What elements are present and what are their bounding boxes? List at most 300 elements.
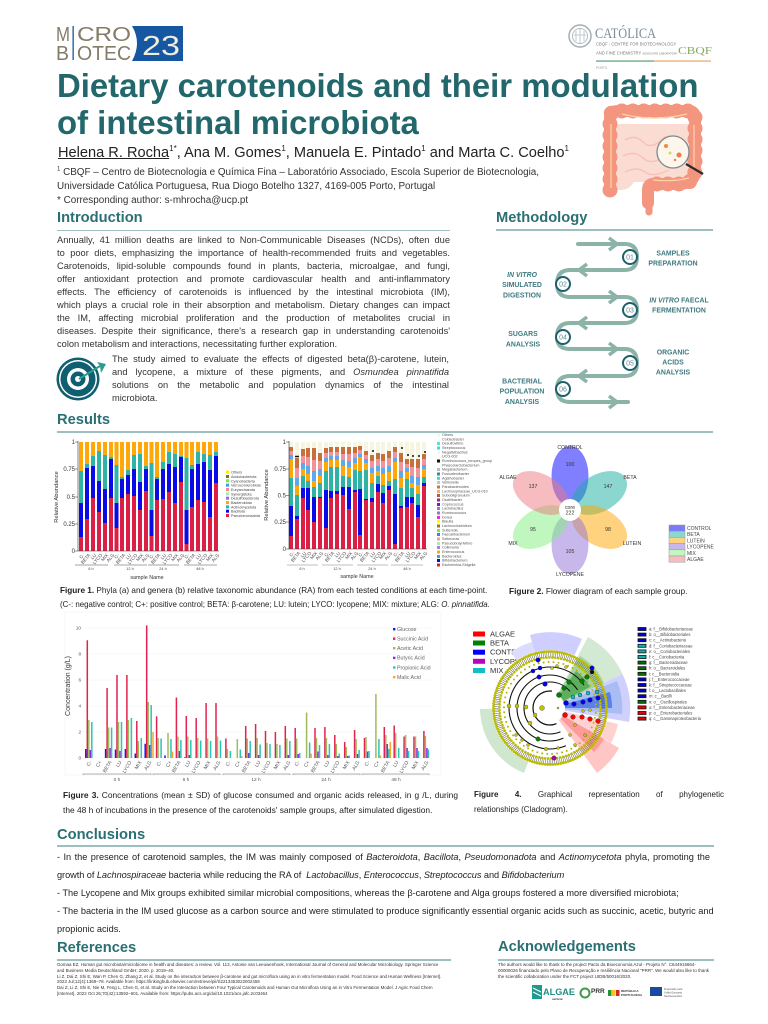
- legend: genera: Lachnospiraceae_UCG-010: [442, 489, 488, 493]
- legend: acids: Butyric Acid: [397, 656, 425, 662]
- chart: glucose and organic acids: 10: [76, 626, 81, 630]
- chart: phyla relative abundance: C-: [148, 552, 156, 560]
- text: acknowledgements: 00000026 financiado pelo Plano de Recuperação e resiliência Nacional "PRR". We would also like to thank: [498, 968, 709, 973]
- text: introduction: colon metabolism and interactions, necessitating further exploration.: [57, 338, 337, 348]
- heading: Results: Results: [57, 412, 110, 428]
- legend: genera: Collinsella: [442, 546, 460, 550]
- chart: glucose and organic acids: MIX: [203, 759, 213, 771]
- chart: phyla relative abundance: ALG: [141, 552, 151, 563]
- chart: genera relative abundance: ALG: [350, 550, 360, 561]
- logos: funding partners: REPÚBLICA: [621, 988, 639, 993]
- legend: genera: Phascolarctobacterium: [442, 463, 480, 467]
- chart: genera relative abundance: 0.25: [274, 520, 287, 526]
- diagram: methodology flow: ACIDS: [662, 360, 684, 366]
- chart: phyla relative abundance: LYCO: [162, 552, 174, 565]
- legend: genera: [442, 433, 492, 567]
- legend: phyla: Bacillota: [231, 510, 246, 514]
- legend: genera: Bifidobacterium: [442, 559, 467, 563]
- legend: flower: LYCOPENE: [687, 545, 715, 551]
- chart: phyla relative abundance: [54, 440, 262, 581]
- legend: phyla: Actinomycetota: [231, 505, 257, 509]
- legend: genera: Faecalibacterium: [442, 533, 470, 537]
- logo: Microbiotec 23: 23: [142, 30, 180, 61]
- text: references: Dai Z, Li Z, Shi E, Nie M, Feng L, Chen G, et al. Study on the Interaction between Four Typical Carotenoids and Human Gut Microflora Using an in Vitro Fermentation Model. J Agric Food Chem: [57, 985, 433, 990]
- legend: flower: CONTROL: [687, 526, 712, 532]
- logo: Catolica CBQF: PORTO: [596, 66, 608, 70]
- chart: glucose and organic acids: C+: [234, 760, 243, 769]
- chart: phyla relative abundance: 0.75: [63, 467, 76, 473]
- authors: Helena R. Rocha1*, Ana M. Gomes1, Manuela E. Pintado1 and Marta C. Coelho1: [58, 144, 569, 161]
- diagram: methodology flow: 02: [559, 282, 567, 288]
- chart: genera relative abundance: 0: [283, 547, 287, 553]
- diagram: methodology flow: 04: [559, 334, 567, 342]
- text: study aim: microbiota.: [112, 392, 157, 402]
- diagram: flower of sample groups: 137: [529, 484, 537, 490]
- legend: genera: Subdoligranulum: [442, 494, 470, 498]
- legend: cladogram taxa: n: o__Oscillospirales: [649, 699, 687, 704]
- chart: phyla relative abundance: BETA: [150, 552, 162, 565]
- legend: flower: MIX: [687, 551, 697, 557]
- logos: funding partners: PRR: [591, 988, 605, 995]
- text: conclusions: - In the presence of carotenoid samples, the IM was mainly composed of Bacteroidota, Bacillota, Pseudomonadota and Actinomycetota phyla, promoting the: [57, 852, 710, 862]
- text: conclusions: - The bacteria in the IM used glucose as a carbon source and were stimulated to produce significantly essential organic acids such as succinic, acetic, butyric and: [57, 906, 714, 916]
- text: study aim: solutions on the metabolic and population dynamics of the intestinal: [112, 380, 449, 390]
- chart: phyla relative abundance: 1: [72, 440, 76, 446]
- chart: genera relative abundance: [264, 433, 492, 580]
- legend: cladogram taxa: q: c__Gammaproteobacteria: [649, 716, 702, 721]
- chart: glucose and organic acids: LYCO: [399, 760, 411, 774]
- chart: glucose and organic acids: LU: [184, 760, 193, 769]
- diagram: methodology flow: FERMENTATION: [652, 308, 706, 314]
- chart: phyla relative abundance: 0.5: [67, 495, 76, 501]
- diagram: flower of sample groups: ALGAE: [499, 475, 517, 481]
- logos: funding partners: Financiado pela: [664, 987, 683, 991]
- legend: genera: Megabacterium: [442, 468, 467, 472]
- diagram: methodology flow: ANALYSIS: [656, 370, 691, 376]
- chart: genera relative abundance: Relative Abundance: [264, 469, 270, 521]
- chart: genera relative abundance: ALG: [315, 550, 325, 561]
- chart: glucose and organic acids: ALG: [143, 760, 154, 772]
- chart: glucose and organic acids: ALG: [212, 760, 223, 772]
- text: conclusions: propionic acids.: [57, 924, 121, 934]
- chart: phyla relative abundance: LU: [125, 553, 132, 560]
- logos: funding partners: vertical: [552, 997, 563, 1001]
- heading: References: References: [57, 940, 136, 956]
- chart: phyla relative abundance: MIX: [135, 553, 144, 562]
- legend: cladogram taxa: l: o__Lactobacillales: [649, 688, 686, 693]
- chart: glucose and organic acids: MIX: [134, 759, 144, 771]
- chart: glucose and organic acids: 4: [78, 704, 81, 708]
- legend: cladogram taxa: o: f__Enterobacteriaceae: [649, 705, 695, 710]
- legend: cladogram groups: BETA: [490, 638, 509, 648]
- diagram: flower of sample groups: LYCOPENE: [556, 572, 584, 578]
- logos: funding partners: NextGeneration: [664, 994, 683, 998]
- diagram: flower of sample groups: 105: [566, 549, 574, 555]
- heading: Conclusions: Conclusions: [57, 827, 145, 843]
- chart: genera relative abundance: 12 h: [333, 567, 341, 571]
- chart: genera relative abundance: ALG: [384, 550, 394, 561]
- legend: cladogram taxa: f: c__Coriobacteriia: [649, 654, 685, 660]
- diagram: methodology flow: 05: [626, 360, 634, 368]
- diagram: methodology flow: SUGARS: [508, 331, 538, 338]
- caption: figure 4: Figure 4. Graphical representation of phylogenetic: [474, 790, 724, 799]
- logos: funding partners: União Europeia: [664, 990, 682, 994]
- heading: Acknowledgements: Acknowledgements: [498, 939, 636, 955]
- logo: Microbiotec 23: CRO: [77, 24, 131, 46]
- chart: genera relative abundance: MIX: [413, 551, 422, 560]
- chart: genera relative abundance: BETA: [359, 550, 371, 563]
- chart: genera relative abundance: LU: [334, 551, 341, 558]
- legend: flower: BETA: [687, 532, 700, 538]
- affiliation: Universidade Católica Portuguesa, Rua Diogo Botelho 1327, 4169-005 Porto, Portugal: [57, 181, 435, 192]
- chart: glucose and organic acids: BETA: [380, 759, 392, 774]
- legend: phyla: Pseudomonadota: [231, 514, 261, 518]
- chart: genera relative abundance: ALG: [419, 550, 429, 561]
- chart: glucose and organic acids: 0: [78, 756, 81, 760]
- legend: cladogram taxa: e: o__Coriobacteriales: [649, 649, 690, 654]
- text: introduction: diseases. Despite their significance, there's a research gap in understanding carotenoids': [57, 326, 450, 336]
- chart: genera relative abundance: 0.5: [278, 494, 287, 500]
- chart: genera relative abundance: LU: [369, 551, 376, 558]
- chart: phyla relative abundance: C-: [183, 552, 191, 560]
- text: study aim: The study aimed to evaluate the effects of digested beta(β)-carotene, lutein,: [112, 354, 449, 364]
- chart: glucose and organic acids: C-: [364, 760, 372, 768]
- text: introduction: effects. The efficiency of carotenoids is influenced by the intestinal microbiota (IM),: [57, 286, 450, 296]
- text: references: Gomaa EZ. Human gut microbiota/microbiome in health and diseases: a review. Vol. 113, Antonie van Leeuwenhoek, International Journal of General and Molecular Microbiology. Springer Science: [57, 962, 438, 967]
- legend: genera: Negativibacillus: [442, 450, 468, 454]
- legend: cladogram taxa: i: c__Bacteroidia: [649, 671, 680, 676]
- legend: cladogram taxa: g: f__Bacteroidaceae: [649, 660, 688, 665]
- chart: phyla relative abundance: ALG: [106, 552, 116, 563]
- diagram: methodology flow: SIMULATED: [502, 282, 542, 289]
- chart: glucose and organic acids: 2: [78, 730, 81, 734]
- text: conclusions: growth of Lachnospiraceae bacteria while reducing the RA of Lactobacillus, Enterococcus, Streptococcus and Bifidobacterium: [57, 870, 564, 880]
- legend: genera: Bacteroides: [442, 554, 462, 558]
- logos: funding partners: [532, 985, 683, 1001]
- diagram: methodology flow: PREPARATION: [648, 260, 698, 268]
- text: introduction: Carotenoids, lipid-soluble compounds found in plants, bacteria, microalgae, and fungi,: [57, 260, 450, 270]
- text: introduction: which plays a crucial role in their absorption and metabolism. Dietary changes can impact: [57, 300, 450, 310]
- legend: cladogram taxa: d: f__Coriobacteriaceae: [649, 643, 693, 648]
- legend: cladogram groups: LYCOPENE: [490, 657, 530, 666]
- title: of intestinal microbiota: [57, 104, 419, 140]
- chart: genera relative abundance: MIX: [309, 551, 318, 560]
- diagram: methodology flow: ANALYSIS: [505, 399, 540, 406]
- chart: glucose and organic acids: MIX: [411, 759, 421, 771]
- chart: glucose and organic acids: LYCO: [191, 760, 203, 774]
- chart: genera relative abundance: LYCO: [371, 550, 383, 563]
- chart: phyla relative abundance: 0: [72, 549, 76, 555]
- legend: genera: Streptococcus: [442, 446, 466, 450]
- diagram: methodology flow: SAMPLES: [656, 250, 690, 258]
- heading: Introduction: Introduction: [57, 210, 143, 226]
- legend: acids: [393, 627, 431, 681]
- diagram: flower of sample groups: 95: [530, 527, 536, 533]
- chart: phyla relative abundance: 12 h: [126, 567, 134, 571]
- legend: phyla: [226, 470, 262, 518]
- chart: phyla relative abundance: 48 h: [196, 567, 204, 571]
- text: conclusions: [57, 852, 714, 934]
- legend: phyla: Euryarchaeota: [231, 488, 256, 492]
- chart: genera relative abundance: LYCO: [336, 550, 348, 563]
- legend: phyla: Bacteroidota: [231, 501, 253, 505]
- chart: phyla relative abundance: C-: [113, 552, 121, 560]
- legend: acids: Succinic Acid: [397, 636, 428, 642]
- chart: glucose and organic acids: LU: [323, 760, 332, 769]
- chart: glucose and organic acids: C+: [373, 760, 382, 769]
- legend: genera: Desulfovibrio: [442, 442, 463, 446]
- chart: phyla relative abundance: ALG: [176, 552, 186, 563]
- chart: glucose and organic acids: 6: [78, 678, 81, 682]
- text: references: [Internet]. 2022 Oct 26;70(42):13592–601. Available from: https://pubs.acs.org/doi/10.1021/acs.jafc.2c03464: [57, 991, 268, 996]
- text: acknowledgements: the scientific collaboration under the FCT project UIDB/50016/2020.: [498, 974, 631, 979]
- diagram: flower of sample groups: CONTROL: [557, 445, 583, 451]
- legend: flower: LUTEIN: [687, 538, 705, 544]
- legend: cladogram groups: ALGAE: [490, 630, 515, 638]
- legend: cladogram taxa: b: o__Bifidobacteriales: [649, 632, 690, 637]
- chart: glucose and organic acids: C-: [225, 760, 233, 768]
- chart: genera relative abundance: 24 h: [368, 567, 376, 571]
- legend: genera: Enterococcus: [442, 550, 464, 554]
- text: references: Li Z, Dai Z, Shi E, Wan P, Chen G, Zhang Z, et al. Study on the interaction between β-carotene and gut microflora using an in vitro fermentation model. Food Science and Human Wellness [Internet].: [57, 974, 441, 979]
- legend: genera: Blautia: [442, 520, 454, 524]
- diagram: flower of sample groups: core: [565, 505, 575, 511]
- legend: cladogram taxa: m: c__Bacilli: [649, 694, 672, 699]
- text: introduction: offer antioxidant protection and promote cardiovascular health and anti-inflammatory: [57, 274, 450, 284]
- diagram: flower of sample groups: BETA: [623, 475, 637, 481]
- chart: genera relative abundance: LYCO: [301, 550, 313, 563]
- diagram: flower of sample groups: 222: [566, 510, 574, 516]
- legend: phyla: Synergistota: [231, 492, 252, 496]
- legend: cladogram taxa: k: f__Streptococcaceae: [649, 682, 693, 688]
- caption: figure 3: Figure 3. Concentrations (mean ± SD) of glucose consumed and organic acids released, in g /L, during: [63, 790, 458, 800]
- legend: genera: Veillonella: [442, 481, 460, 485]
- chart: glucose and organic acids: ALG: [282, 760, 293, 772]
- diagram: methodology flow: 01: [626, 254, 634, 262]
- chart: genera relative abundance: C-: [288, 550, 296, 558]
- chart: phyla relative abundance: BETA: [185, 552, 197, 565]
- legend: flower: ALGAE: [687, 557, 704, 563]
- chart: genera relative abundance: LU: [404, 551, 411, 558]
- chart: glucose and organic acids: 0 h: [114, 777, 121, 783]
- diagram: methodology flow: DIGESTION: [503, 292, 541, 300]
- legend: cladogram taxa: [638, 626, 702, 721]
- diagram: methodology flow: 03: [626, 308, 634, 314]
- chart: genera relative abundance: LYCO: [405, 550, 417, 563]
- legend: acids: Malic Acid: [397, 675, 421, 681]
- chart: glucose and organic acids: LYCO: [330, 760, 342, 774]
- caption: figure 1: (C-: negative control; C+: positive control; BETA: β-carotene; LU: lutein; LYCO: lycopene; MIX: mixture; ALG: O. pinnatifida.: [60, 600, 490, 609]
- legend: phyla: Acidobacteriota: [231, 475, 257, 479]
- chart: genera relative abundance: MIX: [378, 551, 387, 560]
- chart: genera relative abundance: LU: [300, 551, 307, 558]
- chart: genera relative abundance: 48 h: [403, 567, 411, 571]
- chart: phyla relative abundance: LU: [195, 553, 202, 560]
- legend: phyla: Cyanobacteria: [231, 479, 256, 483]
- logo: Catolica CBQF: CBQF - CENTRE FOR BIOTECHNOLOGY: [596, 42, 676, 46]
- legend: cladogram taxa: a: f__Bifidobacteriaceae: [649, 626, 694, 632]
- legend: genera: Parabacteroides: [442, 485, 469, 489]
- chart: phyla relative abundance: MIX: [170, 553, 179, 562]
- chart: phyla relative abundance: sample Name: [130, 575, 164, 581]
- chart: genera relative abundance: BETA: [394, 550, 406, 563]
- chart: genera relative abundance: C-: [323, 550, 331, 558]
- chart: genera relative abundance: BETA: [324, 550, 336, 563]
- diagram: methodology flow: ORGANIC: [657, 350, 689, 356]
- diagram: flower of sample groups: 147: [604, 484, 612, 490]
- logo: Microbiotec 23: [56, 24, 183, 64]
- text: references: 2023 Jul;12(4):1369–78. Available from: https://linkinghub.elsevier.com/retrieve/pii/S2213453022002459: [57, 979, 260, 984]
- chart: glucose and organic acids: [65, 612, 441, 783]
- legend: genera: Lactobacillus: [442, 507, 463, 511]
- diagram: methodology flow: ANALYSIS: [506, 342, 541, 348]
- chart: glucose and organic acids: 24 h: [321, 777, 331, 783]
- chart: phyla relative abundance: LYCO: [127, 552, 139, 565]
- logos: funding partners: ALGAE: [543, 987, 575, 998]
- chart: glucose and organic acids: LU: [115, 760, 124, 769]
- caption: figure 1: Figure 1. Phyla (a) and genera (b) relative taxonomic abundance (RA) from each tested conditions at each time-point.: [60, 586, 487, 595]
- legend: genera: Sutterella: [442, 528, 459, 532]
- caption: figure 1: [60, 586, 490, 609]
- legend: genera: UCG-002: [442, 455, 458, 459]
- chart: genera relative abundance: C-: [357, 550, 365, 558]
- diagram: flower of sample groups: MIX: [508, 541, 518, 547]
- chart: glucose and organic acids: C+: [95, 760, 104, 769]
- legend: acids: Glucose: [397, 627, 416, 633]
- title: [57, 66, 698, 140]
- diagram: methodology flow: 06: [559, 386, 567, 394]
- text: introduction: the IM, affecting microbial proliferation and the production of metabolites crucial in: [57, 312, 450, 322]
- diagram: flower of sample groups: LUTEIN: [623, 541, 641, 547]
- chart: phyla relative abundance: MIX: [205, 553, 214, 562]
- text: references: [57, 962, 441, 996]
- text: acknowledgements: [498, 962, 709, 979]
- legend: phyla: Others: [231, 470, 242, 474]
- chart: glucose and organic acids: Concentration (g/L): [65, 656, 72, 716]
- legend: genera: Ruminococcus: [442, 511, 466, 515]
- icon: intestine with magnifier: [602, 104, 704, 216]
- chart: glucose and organic acids: ALG: [420, 760, 431, 772]
- legend: genera: Selimonas: [442, 537, 459, 541]
- legend: phyla: Verrucomicrobiota: [231, 484, 262, 488]
- logos: funding partners: PORTUGUESA: [621, 993, 643, 997]
- chart: glucose and organic acids: BETA: [171, 759, 183, 774]
- text: references: and Business Media Deutschland GmbH; 2020. p. 2019–40.: [57, 968, 174, 973]
- legend: genera: Coprococcus: [442, 502, 464, 506]
- chart: genera relative abundance: 1: [283, 440, 287, 446]
- chart: glucose and organic acids: 8: [78, 652, 81, 656]
- chart: phyla relative abundance: LYCO: [92, 552, 104, 565]
- chart: phyla relative abundance: Relative Abundance: [54, 471, 60, 523]
- chart: glucose and organic acids: LU: [254, 760, 263, 769]
- legend: cladogram groups: CONTROL: [490, 648, 527, 657]
- legend: phyla: Desulfobacterota: [231, 497, 260, 501]
- diagram: methodology flow: [500, 238, 709, 408]
- text: study aim: and lycopene, a mixture of these pigments, and Osmundea pinnatifida: [112, 366, 449, 376]
- legend: genera: Fusicatenibacter: [442, 472, 470, 476]
- legend: cladogram groups: [473, 630, 530, 675]
- logo: Catolica CBQF: CBQF: [678, 45, 712, 57]
- caption: figure 2: Figure 2. Flower diagram of each sample group.: [509, 586, 687, 596]
- diagram: methodology flow: POPULATION: [500, 388, 544, 396]
- chart: phyla relative abundance: ALG: [211, 552, 221, 563]
- chart: phyla relative abundance: LU: [160, 553, 167, 560]
- text: introduction: Annually, 41 million deaths are linked to Non-Communicable Diseases (NCDs), often due: [57, 234, 450, 244]
- chart: glucose and organic acids: LYCO: [122, 760, 134, 774]
- logo: Catolica CBQF: AND FINE CHEMISTRY ASSOCIATE LABORATORY: [596, 50, 678, 56]
- chart: glucose and organic acids: ALG: [351, 760, 362, 772]
- legend: genera: Escherichia-Shigella: [442, 563, 476, 567]
- chart: genera relative abundance: 0.75: [274, 467, 287, 473]
- icon: target with arrow: [56, 358, 106, 400]
- diagram: flower of sample groups: [499, 445, 715, 578]
- chart: glucose and organic acids: LU: [392, 760, 401, 769]
- legend: genera: Oscillibacter: [442, 498, 463, 502]
- chart: genera relative abundance: BETA: [290, 550, 302, 563]
- chart: glucose and organic acids: BETA: [241, 759, 253, 774]
- chart: glucose and organic acids: 48 h: [391, 777, 401, 783]
- chart: glucose and organic acids: C-: [86, 760, 94, 768]
- chart: glucose and organic acids: LYCO: [261, 760, 273, 774]
- legend: genera: Ruminococcus_torques_group: [442, 459, 492, 463]
- chart: glucose and organic acids: BETA: [310, 759, 322, 774]
- legend: cladogram taxa: h: o__Bacteroidales: [649, 666, 685, 671]
- diagram: flower of sample groups: 100: [566, 462, 574, 468]
- chart: phyla relative abundance: LU: [90, 553, 97, 560]
- chart: phyla relative abundance: LYCO: [197, 552, 209, 565]
- logo: Catolica CBQF: [568, 24, 712, 70]
- title: Dietary carotenoids and their modulation: [57, 66, 698, 104]
- legend: genera: Lachnoclostridium: [442, 524, 472, 528]
- chart: genera relative abundance: C-: [392, 550, 400, 558]
- caption: figure 3: the 48 h of incubations in the presence of the carotenoids' sample groups, after simulated digestion.: [63, 805, 432, 815]
- legend: flower: [669, 525, 715, 563]
- text: introduction: to poor diets, emphasizing the importance of health-recommended fruits and vegetables.: [57, 248, 450, 258]
- legend: genera: Agathobacter: [442, 476, 465, 480]
- chart: glucose and organic acids: 6 h: [183, 777, 190, 783]
- diagram: methodology flow: IN VITRO: [507, 272, 538, 279]
- legend: acids: Acetic Acid: [397, 646, 423, 652]
- chart: genera relative abundance: MIX: [344, 551, 353, 560]
- diagram: methodology flow: IN VITRO FAECAL: [649, 298, 709, 304]
- legend: acids: Propionic Acid: [397, 665, 431, 671]
- caption: figure 4: relationships (Cladogram).: [474, 805, 568, 814]
- chart: cladogram: [480, 632, 630, 773]
- chart: genera relative abundance: sample Name: [340, 574, 374, 580]
- chart: phyla relative abundance: C-: [78, 552, 86, 560]
- chart: phyla relative abundance: 0.25: [63, 522, 76, 528]
- legend: cladogram taxa: j: f__Enterococcaceae: [648, 677, 690, 682]
- text: acknowledgements: The authors would like to thank to the project Pacto da Bioeconomia Azul - Projeto N°. C644915664-: [498, 962, 696, 967]
- logo: Microbiotec 23: M: [56, 24, 70, 46]
- chart: phyla relative abundance: BETA: [80, 552, 92, 565]
- logo: Catolica CBQF: CATÓLICA: [595, 25, 656, 42]
- corresponding author: * Corresponding author: s-mhrocha@ucp.pt: [57, 195, 248, 206]
- legend: genera: Others: [442, 433, 453, 437]
- chart: glucose and organic acids: C+: [303, 760, 312, 769]
- legend: genera: Pseudobutyrivibrio: [442, 541, 472, 545]
- chart: glucose and organic acids: C-: [156, 760, 164, 768]
- text: conclusions: - The Lycopene and Mix groups exhibited similar microbial compositions, whereas the β-carotene and Alga groups fostered a more diversified microbiota;: [57, 888, 679, 898]
- chart: phyla relative abundance: 24 h: [159, 567, 167, 571]
- affiliation: 1 CBQF – Centro de Biotecnologia e Química Fina – Laboratório Associado, Escola Superior de Biotecnologia,: [57, 167, 539, 178]
- chart: glucose and organic acids: C+: [165, 760, 174, 769]
- legend: genera: Dorea: [442, 515, 453, 519]
- legend: cladogram taxa: c: c__Actinobacteria: [649, 638, 687, 643]
- chart: glucose and organic acids: 12 h: [251, 777, 261, 783]
- caption: figure 4: [474, 790, 724, 814]
- text: introduction: [57, 234, 450, 349]
